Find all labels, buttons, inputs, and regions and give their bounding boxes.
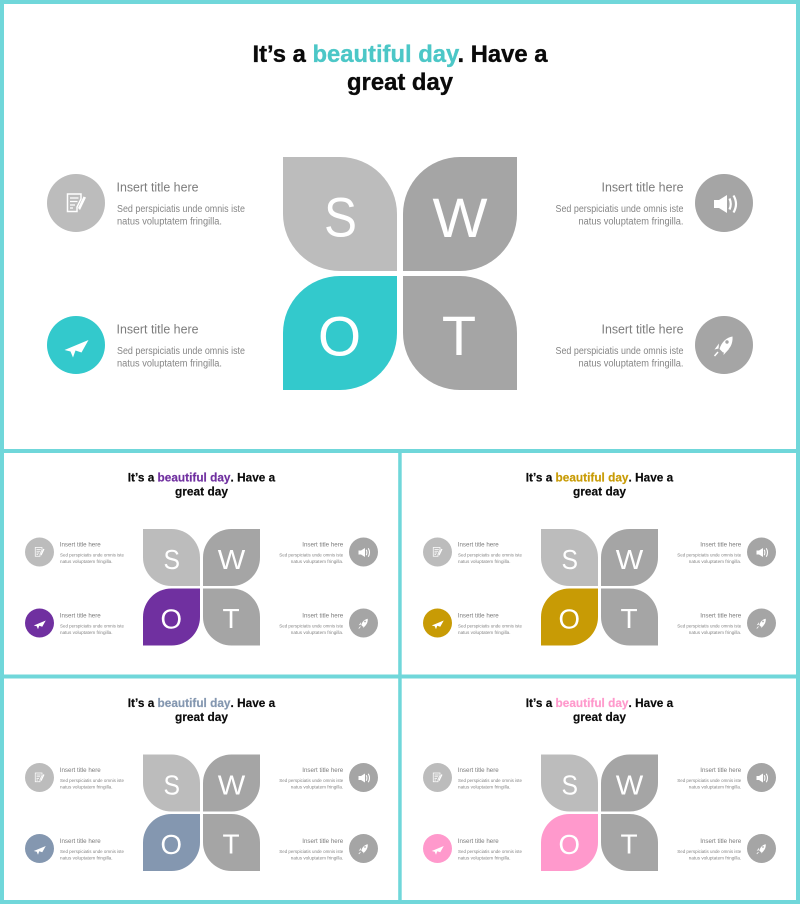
text block: top left: natus voluptatem fringilla. [60, 559, 112, 565]
text block: bottom right [279, 838, 344, 861]
text block: top left: Sed perspiciatis unde omnis iste [458, 552, 522, 558]
text block: bottom left: Insert title here [60, 612, 101, 619]
title second line: great day [175, 484, 228, 498]
petal O [143, 814, 200, 871]
icon: paper plane [423, 608, 452, 638]
text block: top right [677, 541, 742, 565]
panel: purple SWOT slide [25, 470, 378, 646]
text block: bottom left [458, 838, 522, 861]
petal O: O [160, 603, 182, 634]
title: It’s a beautiful day. Have a [526, 696, 674, 710]
petal T [601, 814, 658, 871]
petal O [541, 588, 598, 646]
text block: top left: Sed perspiciatis unde omnis iste [60, 552, 124, 558]
text block: top right: natus voluptatem fringilla. [689, 559, 741, 565]
text block: top right: Insert title here [302, 541, 344, 548]
petal S: S [164, 544, 180, 575]
icon: rocket [349, 608, 378, 638]
petal W [203, 529, 260, 586]
text block: bottom left: Sed perspiciatis unde omnis iste [60, 624, 124, 630]
text block: top left [60, 541, 124, 565]
text block: top right: Insert title here [302, 767, 344, 774]
title second line: great day [347, 69, 454, 96]
petal T [203, 814, 260, 871]
text block: bottom left: natus voluptatem fringilla. [117, 358, 222, 370]
petal T [601, 588, 658, 646]
text block: top right: Insert title here [602, 180, 684, 194]
text block: bottom right: natus voluptatem fringilla. [689, 630, 741, 636]
panel: slate SWOT slide [25, 696, 378, 871]
text block: bottom right: Insert title here [700, 612, 742, 619]
icon: speaker [695, 174, 753, 232]
text block: top left: Sed perspiciatis unde omnis iste [117, 204, 245, 215]
text block: top right [556, 180, 684, 228]
text block: bottom left: Sed perspiciatis unde omnis iste [60, 849, 124, 855]
panel: pink SWOT slide [423, 696, 776, 871]
petal O: O [558, 603, 580, 634]
petal O: O [318, 304, 361, 368]
title: It’s a beautiful day. Have a [526, 470, 674, 484]
text block: top right: natus voluptatem fringilla. [578, 216, 684, 228]
text block: top right: Sed perspiciatis unde omnis iste [677, 552, 742, 558]
text block: bottom left: natus voluptatem fringilla. [60, 630, 112, 636]
icon: paper plane [25, 834, 54, 863]
text block: top right: natus voluptatem fringilla. [291, 559, 343, 565]
text block: bottom left: Sed perspiciatis unde omnis iste [458, 849, 522, 855]
petal S [283, 157, 397, 271]
icon: speaker [349, 538, 378, 566]
text block: bottom left: Sed perspiciatis unde omnis iste [458, 624, 522, 630]
text block: top right: natus voluptatem fringilla. [291, 784, 343, 790]
petal T: T [442, 304, 476, 367]
text block: bottom left [60, 612, 124, 636]
petal O [283, 276, 397, 390]
icon: speaker [349, 763, 378, 792]
text block: bottom right: Sed perspiciatis unde omnis iste [279, 624, 344, 630]
text block: top left: natus voluptatem fringilla. [458, 559, 510, 565]
petal W: W [218, 544, 246, 575]
text block: bottom left: natus voluptatem fringilla. [458, 855, 510, 861]
petal O [143, 588, 200, 646]
text block: top left: Insert title here [458, 767, 499, 774]
petal O: O [558, 829, 580, 860]
text block: bottom right: Insert title here [700, 838, 742, 845]
text block: top right: Sed perspiciatis unde omnis iste [556, 204, 684, 215]
petal S [143, 754, 200, 812]
petal T: T [620, 603, 638, 634]
text block: top left: Insert title here [60, 541, 101, 548]
text block: bottom right [677, 612, 742, 636]
text block: bottom right: Insert title here [302, 612, 344, 619]
petal T: T [222, 603, 240, 634]
text block: top left: natus voluptatem fringilla. [458, 784, 510, 790]
petal S: S [324, 186, 357, 248]
text block: bottom right: Sed perspiciatis unde omnis iste [279, 849, 344, 855]
petal O [541, 814, 598, 871]
petal W [601, 754, 658, 812]
petal W [403, 157, 517, 271]
petal W: W [432, 186, 488, 249]
text block: bottom right: natus voluptatem fringilla. [578, 358, 684, 370]
title: It’s a beautiful day. Have a [128, 696, 276, 710]
text block: top right: Sed perspiciatis unde omnis iste [279, 552, 344, 558]
petal W: W [616, 770, 644, 800]
petal S [541, 754, 598, 812]
text block: top left: Sed perspiciatis unde omnis iste [458, 778, 522, 784]
text block: bottom right [677, 838, 742, 861]
text block: top left: Sed perspiciatis unde omnis iste [60, 778, 124, 784]
text block: bottom left: Insert title here [458, 838, 499, 845]
petal S [541, 529, 598, 586]
text block: bottom left: natus voluptatem fringilla. [60, 855, 112, 861]
title second line: great day [175, 710, 228, 724]
text block: top left: Insert title here [458, 541, 499, 548]
text block: top left [116, 180, 245, 228]
panel: gold SWOT slide [423, 470, 776, 646]
icon: paper plane [47, 316, 105, 374]
icon: rocket [747, 608, 776, 638]
text block: bottom right: Sed perspiciatis unde omnis iste [556, 346, 684, 357]
text block: top right: Sed perspiciatis unde omnis iste [279, 778, 344, 784]
icon: rocket [349, 834, 378, 863]
petal W: W [616, 544, 644, 575]
petal W: W [218, 770, 246, 800]
icon: paper plane [423, 834, 452, 863]
icon: rocket [695, 316, 753, 374]
title second line: great day [573, 710, 626, 724]
text block: top left [60, 767, 124, 790]
icon: paper plane [25, 608, 54, 638]
text block: top left: Insert title here [116, 180, 199, 194]
petal S [143, 529, 200, 586]
text block: top right: Insert title here [700, 541, 742, 548]
title second line: great day [573, 484, 626, 498]
petal T [203, 588, 260, 646]
text block: bottom right: natus voluptatem fringilla. [291, 855, 343, 861]
text block: bottom right [279, 612, 344, 636]
text block: bottom right: Insert title here [302, 838, 344, 845]
text block: top right [677, 767, 742, 790]
petal S: S [562, 769, 578, 800]
icon: speaker [747, 763, 776, 792]
icon: speaker [747, 538, 776, 566]
text block: bottom right: Sed perspiciatis unde omnis iste [677, 624, 742, 630]
title: It’s a beautiful day. Have a [128, 470, 276, 484]
text block: top left: natus voluptatem fringilla. [117, 216, 222, 228]
icon: document [423, 763, 452, 792]
text block: bottom left: natus voluptatem fringilla. [458, 630, 510, 636]
text block: top left: natus voluptatem fringilla. [60, 784, 112, 790]
icon: document [47, 174, 105, 232]
text block: top left [458, 541, 522, 565]
text block: bottom right: Sed perspiciatis unde omnis iste [677, 849, 742, 855]
text block: top right [279, 541, 344, 565]
text block: bottom left: Insert title here [116, 322, 199, 336]
petal S: S [164, 769, 180, 800]
text block: bottom left: Insert title here [458, 612, 499, 619]
panel: main teal SWOT slide [47, 41, 753, 390]
title: It’s a beautiful day. Have a [252, 41, 548, 68]
text block: bottom left [116, 322, 245, 370]
text block: bottom right: natus voluptatem fringilla. [689, 855, 741, 861]
text block: bottom right [556, 322, 684, 370]
petal W [601, 529, 658, 586]
petal T: T [222, 828, 240, 860]
icon: document [25, 763, 54, 792]
text block: bottom left [60, 838, 124, 861]
petal T [403, 276, 517, 390]
icon: document [423, 538, 452, 566]
petal T: T [620, 828, 638, 860]
petal O: O [160, 829, 182, 860]
petal W [203, 754, 260, 812]
text block: top right: Insert title here [700, 767, 742, 774]
text block: bottom left: Insert title here [60, 838, 101, 845]
text block: bottom left [458, 612, 522, 636]
text block: top left: Insert title here [60, 767, 101, 774]
text block: top right: natus voluptatem fringilla. [689, 784, 741, 790]
petal S: S [562, 544, 578, 575]
icon: rocket [747, 834, 776, 863]
text block: bottom left: Sed perspiciatis unde omnis iste [117, 346, 245, 357]
text block: bottom right: Insert title here [602, 322, 684, 336]
text block: top right: Sed perspiciatis unde omnis iste [677, 778, 742, 784]
text block: top right [279, 767, 344, 790]
icon: document [25, 538, 54, 566]
text block: top left [458, 767, 522, 790]
text block: bottom right: natus voluptatem fringilla. [291, 630, 343, 636]
